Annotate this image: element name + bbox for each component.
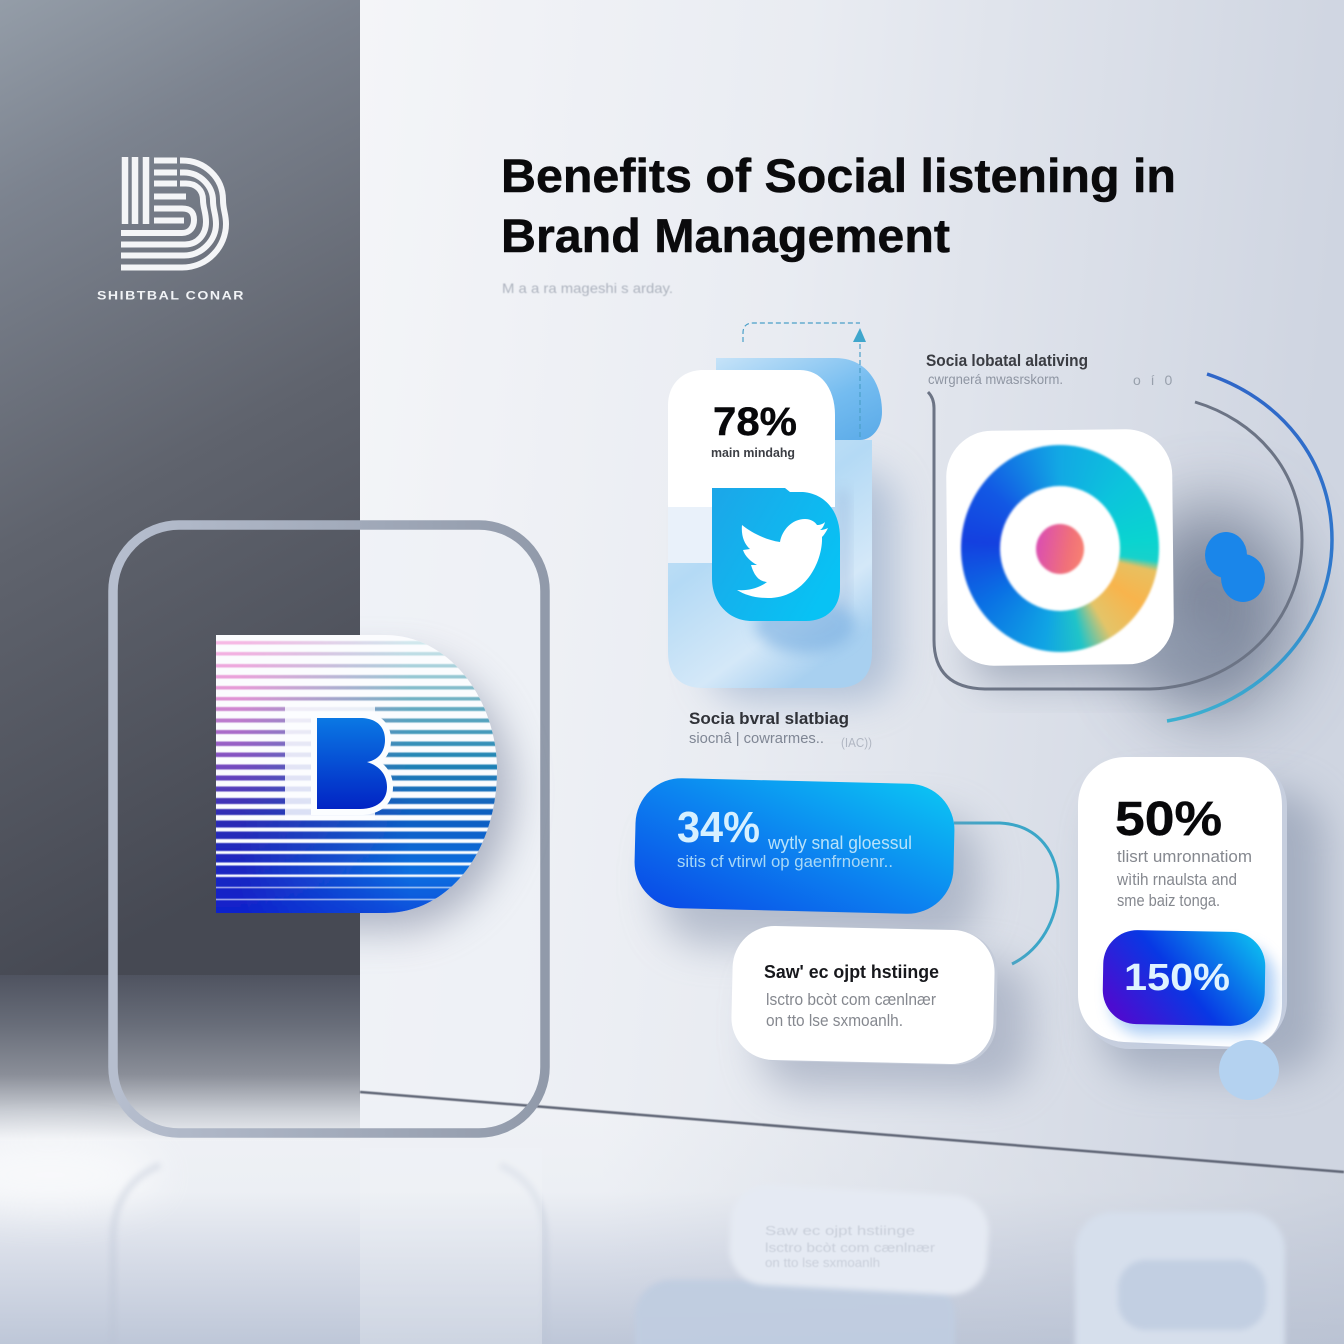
frame outline (113, 525, 545, 1133)
caption: social brand mid: (IAC)) (841, 735, 872, 750)
icon: blue blob (1205, 532, 1265, 602)
reflection: note text: Saw ec ojpt hstiinge (765, 1223, 915, 1238)
back blue card (716, 358, 882, 440)
panel: 34% blue pill (633, 777, 980, 945)
reflection: tall card (1075, 1212, 1285, 1344)
logo mark (121, 157, 226, 268)
card text (1116, 848, 1252, 910)
emblem: B letter (317, 718, 387, 809)
caption: social listening top right: Socia lobatal alativing (926, 352, 1088, 370)
tile shadow on glass (755, 597, 855, 653)
title: Benefits of Social listening in (501, 149, 1176, 202)
note text: lsctro bcòt com cænlnær (766, 991, 936, 1009)
panel: white note card: on tto lse sxmoanlh. (766, 1012, 903, 1030)
caption: social listening top right (926, 352, 1175, 388)
card text: tlisrt umronnatiom (1117, 848, 1252, 866)
icon: twitter tile (712, 488, 840, 621)
panel: white note card (731, 925, 1030, 1090)
stat label: main mindahg (711, 445, 795, 460)
centre dot (1036, 524, 1084, 574)
caption: social brand mid (689, 709, 872, 750)
glass frame with brand emblem (113, 525, 1344, 1172)
title (501, 149, 1176, 262)
arrow: dashed connector (743, 323, 866, 440)
icon: bird (737, 519, 828, 598)
target panel shadow (970, 505, 1294, 715)
stat: 50%: 50% (1115, 793, 1222, 846)
reflection: blue pill (635, 1280, 955, 1344)
brand logo (97, 157, 245, 302)
wall base line (360, 1092, 1344, 1172)
decorative circle (1219, 1040, 1279, 1100)
background: right wall (360, 0, 1344, 1172)
emblem: striped D (216, 635, 497, 913)
pill shadow (660, 815, 980, 945)
pale band (668, 507, 728, 563)
card text: wìtih rnaulsta and (1116, 871, 1237, 889)
connector line (954, 823, 1058, 964)
reflection: note text (765, 1223, 936, 1270)
reflection: frame (113, 1165, 545, 1344)
panel: 34% blue pill: sitis cf vtirwl op gaenfrnoenr.. (677, 852, 893, 871)
reflection: note card (728, 1183, 990, 1297)
panel: target card with ring (946, 429, 1174, 666)
floor highlight (0, 1139, 160, 1211)
logo wordmark: SHIBTBAL CONAR (97, 288, 245, 302)
title: Brand Management (501, 209, 950, 262)
stat: 150%: 150% (1124, 957, 1230, 999)
caption: social brand mid: siocnâ | cowrarmes.. (689, 730, 824, 747)
pill text: wytly snal gloessul (767, 833, 912, 853)
subtitle: M a a ra mageshi s arday. (502, 280, 673, 296)
note body (731, 925, 995, 1065)
note heading: Saw' ec ojpt hstiinge (764, 962, 939, 982)
card shadow (710, 470, 895, 700)
pill body (633, 777, 956, 915)
card body (1078, 757, 1282, 1047)
background: left dark panel (0, 0, 360, 975)
stat: 78%: 78% (713, 400, 797, 444)
reflection: note text: lsctro bcòt com cænlnær (765, 1240, 936, 1255)
caption: social listening top right: cwrgnerá mwasrskorm. (928, 372, 1063, 387)
caption: social listening top right: o í 0 (1133, 372, 1175, 388)
arc: gray bracket (928, 392, 1302, 689)
card text: sme baiz tonga. (1117, 892, 1220, 910)
panel: 78% Twitter card (668, 323, 895, 700)
background: floor (0, 1090, 1344, 1344)
frame shadow (553, 560, 567, 1090)
reflection: frame glass (360, 1148, 542, 1344)
background: floor shading (600, 1090, 1344, 1344)
reflection: inner pill (1118, 1260, 1266, 1330)
background: left floor (0, 975, 360, 1141)
inner pill (1102, 930, 1266, 1026)
caption: social brand mid: Socia bvral slatbiag (689, 709, 849, 728)
tile side shade (838, 490, 848, 610)
ring centre (999, 485, 1121, 612)
stat: 34%: 34% (677, 803, 760, 852)
emblem shadow (360, 641, 533, 952)
card shadow (1100, 790, 1325, 1075)
arc: blue outer (1167, 374, 1332, 721)
frame glass interior (360, 530, 540, 1128)
note shadow (760, 960, 1030, 1090)
white card (668, 370, 835, 507)
glass card (668, 440, 872, 688)
ring chart (960, 444, 1160, 653)
reflection: note text: on tto lse sxmoanlh (765, 1255, 880, 1270)
pill glow (1110, 945, 1275, 1035)
floor reflections (113, 1148, 1285, 1344)
panel: 50% and 150% card (1078, 757, 1325, 1100)
